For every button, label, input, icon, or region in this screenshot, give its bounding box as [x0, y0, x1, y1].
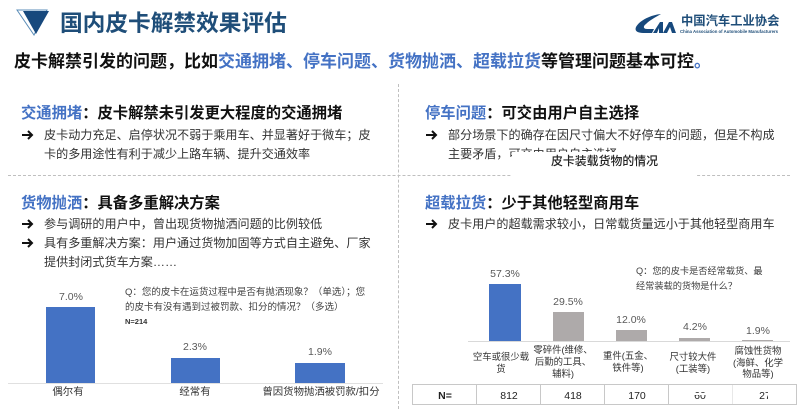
logo English name: China Association of Automobile Manufacturers [680, 29, 778, 34]
bullet text: 主要矛盾，可交由用户自主选择 [448, 147, 617, 161]
icon: title triangle [16, 10, 49, 36]
heading: overloading: 超载拉货：少于其他轻型商用车 [425, 195, 639, 212]
bullet text: 部分场景下的确存在因尺寸偏大不好停车的问题，但是不构成 [448, 128, 775, 142]
category: occasionally: 偶尔有 [52, 387, 84, 398]
bullet text: 卡的多用途性有利于减少上路车辆、提升交通效率 [44, 147, 310, 161]
value 1.9%: 1.9% [308, 346, 332, 358]
logo: China Association of Automobile Manufacturers [636, 14, 780, 34]
vertical dashed divider [398, 84, 399, 409]
bar chart: cargo spill [8, 291, 383, 398]
category: empty: 货 [496, 362, 506, 374]
bullet text 2: 提供封闭式货车方案…… [44, 255, 177, 269]
bullet text 2: 具有多重解决方案：用户通过货物加固等方式自主避免、厂家 [44, 236, 371, 250]
cell: 27: 27 [759, 390, 771, 402]
survey question: cargo spill: 的皮卡有没有遇到过被罚款、扣分的情况？（多选） [125, 302, 344, 313]
icon: arrow 1 [22, 219, 34, 229]
cell: 418: 418 [564, 390, 582, 402]
column dividers [476, 385, 477, 404]
bullet text 1: 参与调研的用户中，曾出现货物抛洒问题的比例较低 [44, 217, 322, 231]
category: corrosive: 物品等) [742, 368, 774, 379]
bar: often 2.3% [171, 358, 220, 383]
category: heavy [603, 350, 653, 373]
table: sample sizes [412, 384, 797, 405]
category: parts: 后勤的工具、 [535, 356, 591, 367]
popup label: cargo loading [512, 152, 696, 178]
survey question: cargo spill [125, 286, 365, 326]
category: large: (工装等) [676, 362, 710, 374]
heading: cargo spill: 货物抛洒：具备多重解决方案 [21, 195, 220, 212]
value 2.3%: 2.3% [183, 341, 207, 353]
category: corrosive [733, 345, 783, 379]
cell: 812: 812 [500, 390, 518, 402]
category: empty: 空车或很少载 [473, 351, 529, 362]
value 4.2%: 4.2% [683, 321, 707, 333]
bullet text: 皮卡用户的超载需求较小，日常载货量远小于其他轻型商用车 [448, 217, 775, 231]
category: penalized: 曾因货物抛洒被罚款/扣分 [262, 387, 380, 398]
icon: arrow [22, 130, 34, 140]
category: corrosive: 腐蚀性货物 [735, 345, 781, 356]
category: empty [473, 351, 529, 374]
cell: 60: 60 [694, 390, 706, 402]
bar: parts 29.5% [553, 312, 584, 341]
category: large: 尺寸较大件 [670, 351, 716, 362]
heading: traffic congestion: 交通拥堵：皮卡解禁未引发更大程度的交通拥堵 [21, 105, 342, 122]
panel: traffic congestion [21, 104, 371, 161]
bullet text: 皮卡动力充足、启停状况不弱于乘用车、并显著好于微车；皮 [44, 128, 371, 142]
bar: penalized 1.9% [295, 363, 345, 383]
category: heavy: 重件(五金、 [603, 350, 653, 361]
panel: parking [425, 104, 775, 161]
category: often: 经常有 [179, 387, 211, 398]
category: parts: 辅料) [552, 368, 574, 379]
category: large [670, 351, 716, 374]
panel: cargo spill [21, 194, 371, 269]
bar: corrosive 1.9% [742, 340, 773, 341]
category: corrosive: (海鲜、化学 [733, 356, 783, 368]
value 29.5%: 29.5% [553, 296, 583, 308]
bar: heavy 12.0% [616, 330, 647, 341]
bullet text 2 [44, 236, 371, 269]
headline summary: 皮卡解禁引发的问题，比如交通拥堵、停车问题、货物抛洒、超载拉货等管理问题基本可控。 [14, 52, 711, 71]
icon: arrow [426, 219, 438, 229]
bullet text [448, 128, 775, 161]
axis [468, 341, 790, 342]
survey question: cargo types [636, 266, 763, 291]
survey question: cargo types: 经常装载的货物是什么？ [636, 281, 737, 291]
icon: arrow [426, 130, 438, 140]
logo Chinese name: 中国汽车工业协会 [681, 14, 779, 28]
survey question: cargo types: Q：您的皮卡是否经常载货、最 [636, 266, 763, 276]
bar: large 4.2% [679, 338, 710, 341]
cell: N=: N= [438, 390, 452, 402]
bar chart: cargo types [468, 268, 790, 379]
horizontal dashed divider [8, 175, 790, 176]
bar: empty 57.3% [489, 284, 521, 341]
popup label: cargo loading: 皮卡装载货物的情况 [551, 154, 658, 168]
survey question: cargo spill: Q：您的皮卡在运货过程中是否有抛洒现象？（单选）；您 [125, 287, 365, 298]
survey question: cargo spill: N=214 [125, 317, 147, 326]
axis [8, 383, 383, 384]
bar: occasionally 7.0% [46, 307, 95, 383]
icon: logo mark [636, 14, 676, 33]
value 7.0%: 7.0% [59, 291, 83, 303]
category: heavy: 铁件等) [612, 362, 644, 372]
heading: parking: 停车问题：可交由用户自主选择 [425, 105, 639, 122]
icon: arrow 2 [22, 238, 34, 248]
bullet text [44, 128, 371, 161]
category: parts: 零碎件(维修、 [533, 344, 593, 355]
panel: overloading [425, 194, 775, 231]
cell: 170: 170 [628, 390, 646, 402]
value 1.9%: 1.9% [746, 325, 770, 337]
value 12.0%: 12.0% [616, 314, 646, 326]
mask over partly hidden digits [693, 393, 707, 395]
value 57.3%: 57.3% [490, 268, 520, 280]
title: 国内皮卡解禁效果评估 [60, 10, 287, 36]
category: parts [533, 344, 593, 379]
